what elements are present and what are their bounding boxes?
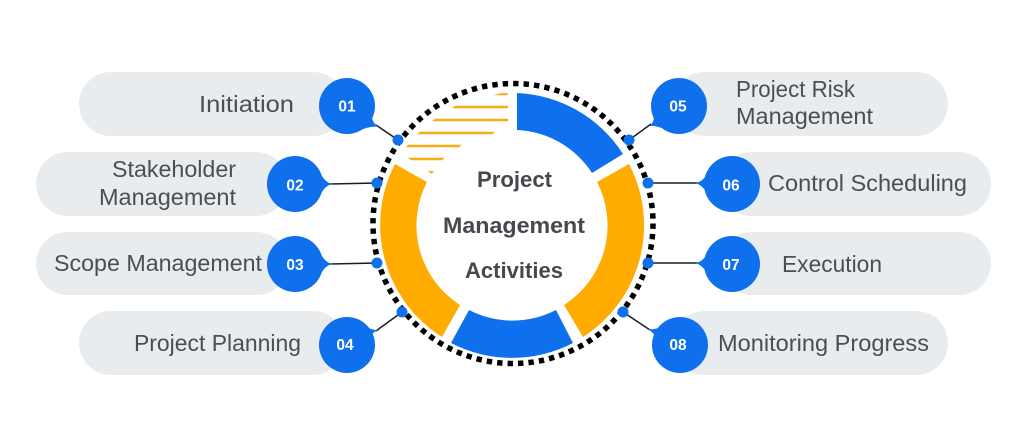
- item 03: Scope Management: Scope Management: [54, 250, 263, 276]
- item 06: Control Scheduling: 06: [722, 178, 740, 194]
- title: Activities: [465, 258, 563, 283]
- segment: orange right: [564, 164, 644, 337]
- item 01: Initiation: 01: [338, 98, 356, 116]
- item 03: Scope Management: 03: [286, 257, 304, 274]
- item 08: Monitoring Progress: [618, 306, 948, 375]
- item 05: Project Risk Management: 05: [669, 98, 687, 116]
- item 05: Project Risk Management: [624, 72, 948, 146]
- item 07: Execution: [642, 232, 991, 295]
- item 02: Stakeholder Management: Management: [99, 184, 237, 210]
- item 05: Project Risk Management: Project Risk: [736, 76, 855, 102]
- title: Management: [443, 213, 586, 238]
- item 06: Control Scheduling: Control Scheduling: [768, 170, 967, 196]
- item 02: Stakeholder Management: [36, 152, 382, 216]
- item 08: Monitoring Progress: Monitoring Progress: [718, 330, 929, 356]
- title: [443, 167, 586, 283]
- segment: blue top right: [517, 93, 623, 173]
- segment: orange left: [380, 164, 460, 337]
- segment: hatched top left: [406, 93, 508, 174]
- item 04: Project Planning: 04: [336, 337, 354, 354]
- central diagram: [373, 84, 653, 364]
- title: Project: [477, 167, 553, 192]
- item 06: Control Scheduling: [642, 152, 991, 216]
- item 07: Execution: Execution: [782, 251, 882, 277]
- item 02: Stakeholder Management: Stakeholder: [112, 156, 236, 182]
- item 02: Stakeholder Management: 02: [286, 178, 304, 194]
- item 05: Project Risk Management: Management: [736, 103, 874, 129]
- item 03: Scope Management: [36, 232, 382, 295]
- item 04: Project Planning: [79, 306, 408, 375]
- item 07: Execution: 07: [722, 257, 740, 274]
- item 08: Monitoring Progress: 08: [669, 337, 687, 354]
- item 04: Project Planning: Project Planning: [134, 330, 301, 356]
- segment: blue bottom: [451, 310, 573, 358]
- item 01: Initiation: Initiation: [199, 91, 294, 117]
- item 01: Initiation: [79, 72, 404, 146]
- dotted ring: [373, 84, 653, 364]
